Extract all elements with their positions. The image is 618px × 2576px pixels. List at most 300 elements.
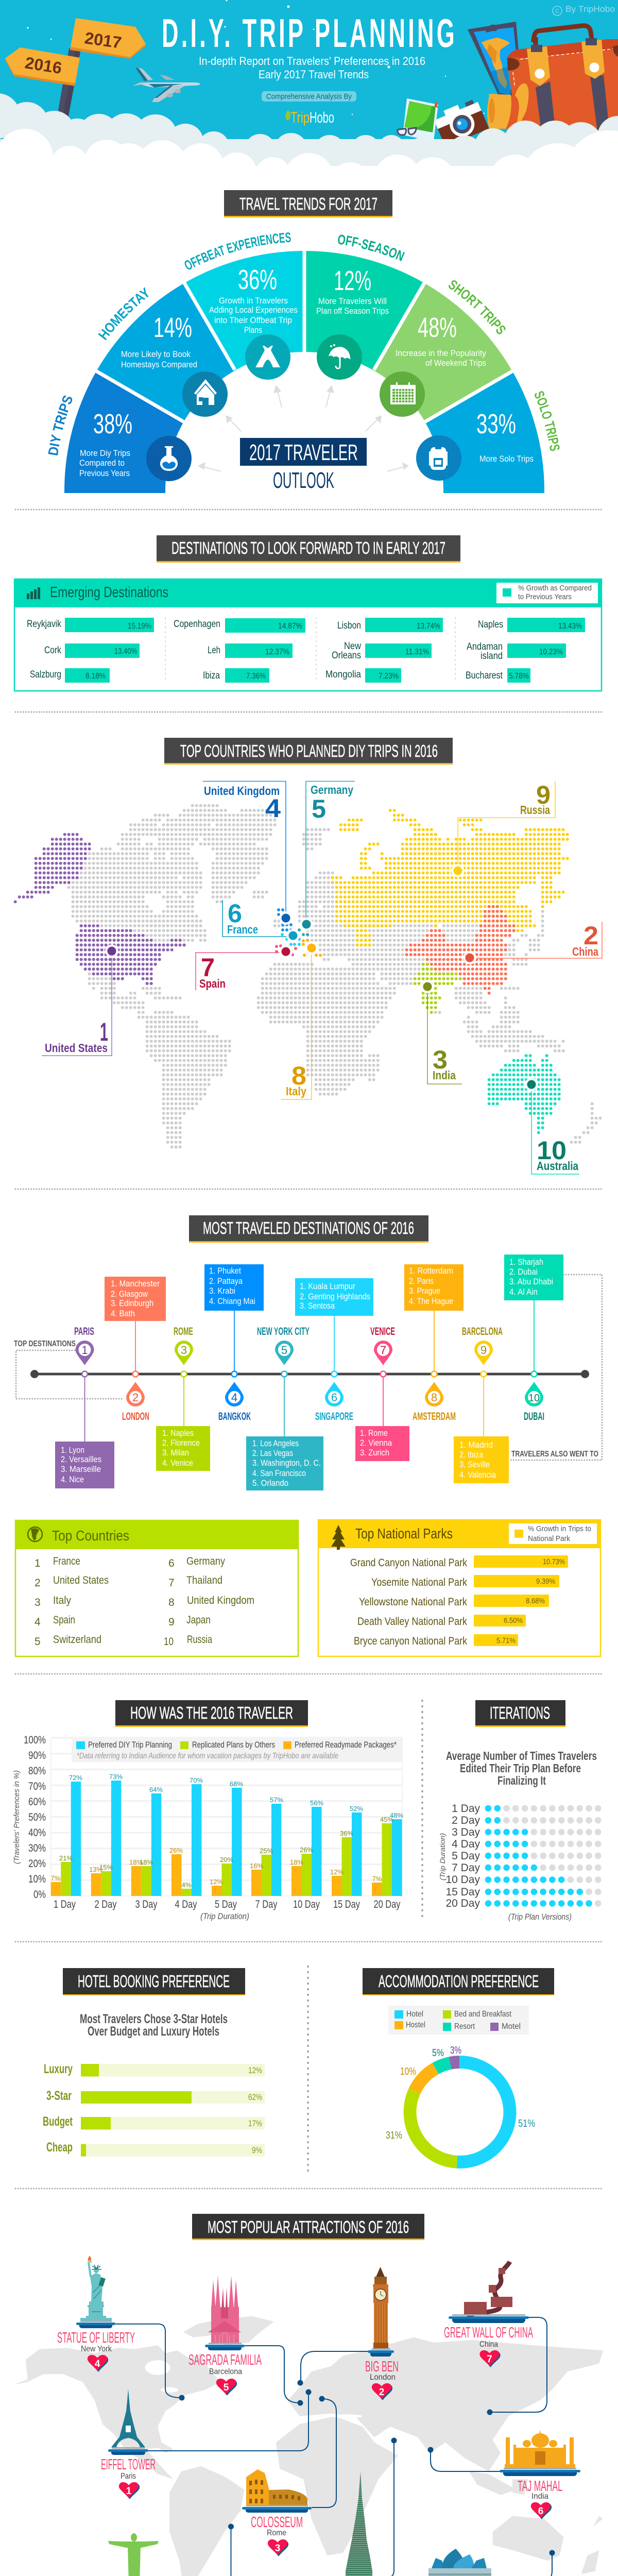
stop: Amsterdam: 2. Paris	[409, 1276, 434, 1286]
stop: Barcelona: 1. Madrid	[459, 1440, 493, 1450]
y axis labels: 80%	[28, 1765, 46, 1777]
dot world map	[0, 799, 618, 1159]
camera	[432, 97, 489, 147]
clouds: light layer	[0, 93, 618, 175]
axis titles	[438, 1833, 572, 1922]
orange value labels: 18%	[129, 1858, 143, 1866]
orange value labels: 7%	[372, 1875, 382, 1883]
stop: New York City: NEW YORK CITY	[257, 1326, 310, 1337]
donut labels: 10%	[400, 2066, 416, 2077]
x axis labels: 5 Day	[215, 1899, 237, 1910]
y axis labels	[24, 1734, 46, 1901]
row labels: 2 Day	[452, 1815, 480, 1826]
bar values: 5.78%	[509, 672, 529, 681]
donut labels: 5%	[432, 2047, 444, 2059]
curved sector labels: OFF-SEASON	[338, 235, 405, 261]
icon: house	[194, 379, 217, 405]
bar values: 12.37%	[265, 648, 289, 656]
sector: off-season	[304, 251, 424, 380]
row labels: 3 Day	[452, 1826, 480, 1838]
TripHobo logo	[285, 109, 334, 126]
green value labels	[59, 1816, 393, 1889]
x axis labels: 10 Day	[293, 1899, 320, 1910]
bar labels: 3-Star	[46, 2089, 72, 2103]
stop: Dubai: 4. Al Ain	[509, 1287, 538, 1297]
stop: Amsterdam: 3. Prague	[409, 1286, 440, 1296]
attraction: Colosseum: COLOSSEUM	[251, 2514, 303, 2531]
blue value labels: 52%	[350, 1805, 363, 1812]
green value labels: 25%	[260, 1847, 273, 1855]
stop: New York City: 1. Los Angeles	[252, 1438, 299, 1448]
stop: Dubai: 2. Dubai	[509, 1267, 538, 1277]
country ranking: Russia	[187, 1634, 212, 1646]
glasses	[398, 128, 416, 135]
x axis labels: 20 Day	[374, 1899, 401, 1910]
curved sector labels: OFFBEAT EXPERIENCES	[184, 232, 291, 270]
x axis labels: 3 Day	[135, 1899, 158, 1910]
axis nodes	[82, 1371, 537, 1377]
sector: offbeat experiences: 36%	[238, 264, 277, 295]
y axis labels: 0%	[33, 1889, 46, 1901]
blue value labels: 48%	[390, 1811, 403, 1819]
callout: 9 Russia: Russia	[520, 803, 550, 817]
grid	[51, 1738, 402, 1880]
orange value labels	[51, 1846, 382, 1886]
legend	[72, 1739, 402, 1762]
attraction: Sagrada Familia: 5	[224, 2382, 229, 2393]
heading: destinations	[157, 535, 460, 563]
icon: globe	[28, 1527, 42, 1541]
row labels: 10 Day	[445, 1874, 480, 1886]
park labels: Bryce canyon National Park	[354, 1635, 467, 1647]
heading: iterations	[475, 1700, 565, 1727]
stop: Venice: VENICE	[370, 1326, 395, 1337]
attraction: Big Ben: London	[370, 2373, 396, 2382]
heading: hotel booking	[63, 1968, 245, 1995]
callout: 2 China: 2	[583, 921, 598, 950]
green value labels: 26%	[300, 1846, 313, 1854]
donut ring	[410, 2062, 510, 2162]
legend: % Growth in Trips to	[528, 1524, 591, 1533]
country ranking	[35, 1555, 254, 1648]
x axis labels	[54, 1899, 401, 1910]
country ranking: 5	[35, 1636, 41, 1648]
callout: 4 United Kingdom: 4	[265, 794, 281, 823]
subtitle: Early 2017 Travel Trends	[259, 68, 369, 81]
y axis labels: 60%	[28, 1796, 46, 1808]
connector end dots	[179, 2380, 555, 2555]
bar labels: New	[344, 641, 361, 652]
subtitle	[199, 55, 425, 81]
attraction: Taj Mahal	[500, 2430, 580, 2519]
attraction: Opera House	[425, 2549, 494, 2576]
stop: Rome: 3	[181, 1344, 187, 1357]
sector: DIY trips: Previous Years	[79, 468, 130, 478]
bar labels: Mongolia	[325, 669, 361, 680]
bar values: 14.87%	[278, 622, 302, 631]
callout: 9 Russia: 9	[536, 781, 551, 809]
country ranking: 10	[164, 1636, 174, 1648]
bar labels: Bucharest	[466, 670, 503, 681]
stop: Barcelona: 3. Seville	[459, 1460, 490, 1469]
row labels: 20 Day	[445, 1897, 480, 1909]
callout: 3 India: India	[433, 1069, 456, 1082]
orange value labels: 7%	[51, 1874, 61, 1882]
hotel description: Most Travelers Chose 3-Star Hotels	[80, 2012, 228, 2026]
iterations dot chart	[438, 1749, 598, 1922]
orange value labels: 16%	[250, 1862, 263, 1870]
attraction: Sagrada Familia: Barcelona	[209, 2367, 242, 2376]
axis titles: (Trip Duration)	[438, 1833, 447, 1880]
signpost: 2017	[83, 28, 123, 52]
stop: Singapore: 3. Sentosa	[300, 1301, 335, 1311]
heading: top countries	[164, 738, 453, 765]
callout: 7 Spain: Spain	[199, 977, 226, 990]
green value labels: 18%	[140, 1858, 153, 1866]
green bars	[61, 1823, 392, 1896]
header banner	[0, 0, 618, 220]
blue dots	[488, 1808, 589, 1903]
stop: London: 3. Edinburgh	[111, 1298, 153, 1308]
grey dots	[507, 1808, 598, 1903]
subtitle: In-depth Report on Travelers' Preferences in 2016	[199, 55, 425, 67]
y axis labels: 40%	[28, 1827, 46, 1839]
attraction: Burj Khalifa	[332, 2471, 390, 2576]
row labels	[445, 1803, 480, 1909]
stop: Bangkok: 4	[231, 1391, 237, 1404]
heading: travel trends	[224, 190, 392, 217]
callout: 8 Italy	[281, 941, 318, 1099]
y axis labels: 20%	[28, 1858, 46, 1870]
bar values: 9%	[252, 2145, 262, 2155]
country ranking: 4	[35, 1616, 41, 1628]
panel: top countries	[15, 1520, 299, 1656]
dividers	[165, 617, 455, 682]
stop: Venice: 1. Rome	[360, 1428, 388, 1438]
stop: Rome: ROME	[174, 1326, 193, 1337]
stop: London: 2	[132, 1391, 139, 1404]
sector dividers	[91, 249, 518, 425]
y axis labels: 100%	[24, 1734, 46, 1746]
panel title: Top Countries	[52, 1528, 129, 1544]
stop: London: 2. Glasgow	[111, 1289, 148, 1299]
blue value labels: 68%	[230, 1780, 243, 1788]
icon: bars	[27, 587, 40, 599]
attraction: Great Wall of China	[444, 2262, 533, 2367]
park values: 10.73%	[543, 1557, 565, 1566]
bar labels: Andaman	[467, 641, 503, 652]
callout: 3 India: 3	[433, 1045, 448, 1074]
bar labels	[43, 2062, 73, 2155]
legend: % Growth as Compared	[518, 584, 592, 592]
trend fan chart	[64, 249, 544, 493]
country ranking: France	[53, 1555, 80, 1567]
icon: backpack	[429, 446, 448, 470]
sky stars	[27, 0, 607, 115]
stop: Paris: 1	[81, 1344, 88, 1357]
sector: short trips: 48%	[418, 312, 457, 343]
sector: DIY trips: 38%	[93, 409, 132, 439]
stop: Dubai	[504, 1255, 563, 1422]
park bars	[474, 1555, 568, 1646]
country ranking: United States	[53, 1574, 109, 1586]
legend: Preferred Readymade Packages*	[295, 1740, 397, 1750]
attraction: Eiffel Tower: Paris	[121, 2472, 136, 2481]
stems	[84, 1300, 534, 1442]
y axis labels: 30%	[28, 1842, 46, 1854]
stop: Amsterdam: 1. Rotterdam	[409, 1266, 453, 1276]
bar labels: Luxury	[44, 2062, 73, 2076]
country ranking: 9	[168, 1616, 175, 1628]
sector: off-season: More Travelers Will	[318, 296, 387, 306]
axis titles: (Trip Plan Versions)	[508, 1912, 572, 1922]
bars	[65, 618, 585, 683]
bar values: 10.23%	[539, 648, 563, 656]
legend: Bed and Breakfast	[454, 2010, 511, 2019]
callout: 10 Australia: Australia	[537, 1159, 578, 1173]
accommodation donut chart	[386, 2006, 535, 2162]
bar values: 7.23%	[379, 672, 399, 681]
stop: Singapore	[295, 1278, 373, 1422]
stop: Bangkok: 2. Pattaya	[209, 1276, 243, 1286]
park labels: Yellowstone National Park	[359, 1596, 467, 1608]
legend: Motel	[502, 2022, 521, 2031]
heading: popular attractions: MOST POPULAR ATTRACTIONS OF 2016	[208, 2217, 409, 2236]
callout: 5 Germany: 5	[312, 794, 326, 823]
attraction: Taj Mahal: TAJ MAHAL	[518, 2478, 562, 2495]
bar values: 8.18%	[85, 672, 106, 681]
callout: 4 United Kingdom	[203, 781, 293, 925]
heading: destinations: DESTINATIONS TO LOOK FORWARD TO IN EARLY 2017	[171, 538, 445, 557]
heading: most traveled: MOST TRAVELED DESTINATIONS OF 2016	[203, 1218, 414, 1238]
callout: 2 China	[463, 921, 602, 964]
sector: off-season: 12%	[334, 265, 371, 296]
sector: short trips: Increase in the Popularity	[396, 348, 486, 358]
icon: tree	[331, 1525, 346, 1550]
orange value labels: 26%	[169, 1846, 183, 1854]
bar values: 12%	[248, 2065, 262, 2075]
sector: homestay: Homestays Compared	[121, 360, 197, 369]
heading: how was the 2016 traveler: HOW WAS THE 2016 TRAVELER	[130, 1703, 293, 1722]
callout: 7 Spain	[196, 945, 293, 990]
bar labels: Orleans	[332, 650, 361, 661]
blue value labels: 57%	[270, 1796, 283, 1804]
green value labels: 36%	[340, 1829, 353, 1837]
legend	[509, 1523, 597, 1544]
bar labels: Leh	[208, 645, 220, 656]
icon: flask	[160, 446, 178, 471]
legend: Replicated Plans by Others	[192, 1740, 275, 1750]
bar labels: Lisbon	[337, 620, 361, 631]
green value labels: 45%	[380, 1816, 393, 1823]
legend: Hostel	[406, 2021, 425, 2029]
x axis labels: 4 Day	[175, 1899, 197, 1910]
stop: Paris: 2. Versailles	[61, 1454, 101, 1464]
bar labels	[27, 619, 503, 681]
stop: Barcelona: 2. Ibiza	[459, 1450, 483, 1460]
bar labels: Ibiza	[203, 670, 220, 681]
sector: homestay	[96, 283, 235, 421]
orange value labels: 13%	[89, 1866, 102, 1873]
hotel booking chart	[43, 2012, 265, 2157]
orange value labels: 12%	[330, 1868, 344, 1876]
stop: New York City: 4. San Francisco	[252, 1468, 306, 1478]
bar values: 11.31%	[405, 648, 429, 656]
callout: 10 Australia	[525, 1078, 579, 1174]
country ranking: 7	[168, 1577, 175, 1589]
callout: 6 France: 6	[228, 899, 242, 928]
legend	[388, 2006, 529, 2035]
stop: Paris: 1. Lyon	[61, 1445, 84, 1455]
blue value labels	[69, 1773, 403, 1819]
stop: Venice: 2. Vienna	[360, 1438, 392, 1448]
center label: 2017 traveler outlook: OUTLOOK	[273, 468, 334, 493]
orange bars	[51, 1854, 382, 1896]
sector: homestay: More Likely to Book	[121, 349, 191, 359]
stop: Amsterdam: 8	[431, 1391, 437, 1404]
attraction: Colosseum: 3	[275, 2543, 280, 2554]
grey world map	[14, 2316, 603, 2576]
suitcase	[507, 26, 618, 155]
blue value labels: 56%	[310, 1799, 323, 1807]
curved sector labels: SOLO TRIPS	[535, 391, 559, 451]
axis line	[30, 1370, 589, 1378]
bar labels: island	[480, 651, 503, 662]
country ranking: 2	[35, 1577, 41, 1589]
signpost	[5, 18, 146, 122]
stop: Bangkok: 4. Chiang Mai	[209, 1296, 255, 1306]
park labels	[350, 1557, 467, 1647]
x axis labels: 2 Day	[95, 1899, 117, 1910]
bar labels: Reykjavik	[27, 619, 61, 630]
legend	[496, 583, 598, 603]
donut labels	[386, 2045, 535, 2141]
sector: short trips	[374, 283, 512, 421]
stop: Paris: 4. Nice	[61, 1475, 84, 1484]
callout: 7 Spain: 7	[201, 953, 215, 982]
attraction: Eiffel Tower	[101, 2389, 156, 2499]
heading: most traveled	[189, 1215, 428, 1243]
curved sector labels	[48, 232, 559, 455]
attraction: Colosseum: Rome	[267, 2529, 286, 2537]
attraction: Statue of Liberty: STATUE OF LIBERTY	[57, 2330, 135, 2346]
callout: 8 Italy: Italy	[286, 1084, 306, 1098]
sector: solo trips: 33%	[476, 409, 516, 439]
stop: Venice	[355, 1326, 409, 1461]
blue value labels: 73%	[109, 1773, 123, 1781]
legend: National Park	[528, 1534, 570, 1543]
stop: Rome: 2. Florence	[162, 1438, 200, 1448]
green value labels: 20%	[220, 1856, 233, 1863]
stop: Bangkok: 1. Phuket	[209, 1266, 241, 1276]
stop: London: LONDON	[122, 1411, 149, 1422]
row labels: 5 Day	[452, 1850, 480, 1862]
callout: 6 France	[222, 899, 300, 942]
stop: Singapore: SINGAPORE	[315, 1411, 353, 1422]
park values: 9.39%	[536, 1577, 555, 1586]
bar values: 17%	[248, 2119, 262, 2128]
curved sector labels: SHORT TRIPS	[449, 280, 506, 334]
blue value labels: 64%	[149, 1786, 163, 1793]
attraction: Great Wall of China: GREAT WALL OF CHINA	[444, 2325, 533, 2341]
stop: New York City: 2. Las Vegas	[252, 1448, 293, 1458]
dotted connector: travelers also went to	[510, 1275, 602, 1460]
bar fills	[81, 2064, 192, 2157]
blue value labels: 72%	[69, 1774, 82, 1782]
dotted connector: top destinations	[14, 1340, 124, 1399]
callout: 1 United States: United States	[45, 1041, 108, 1055]
icon: calendar	[390, 382, 416, 404]
y axis title: (Travelers' Preferences in %)	[12, 1770, 21, 1864]
panel title: Emerging Destinations	[50, 584, 168, 601]
y axis labels: 50%	[28, 1811, 46, 1823]
iterations description: Finalizing It	[497, 1774, 546, 1787]
stop: Paris: PARIS	[74, 1326, 94, 1337]
stop: London: 4. Bath	[111, 1309, 135, 1318]
sector: offbeat experiences: Growth in Travelers	[219, 296, 288, 306]
x axis labels: 15 Day	[333, 1899, 360, 1910]
curved sector labels: HOMESTAY	[98, 287, 148, 340]
sector: off-season: Plan off Season Trips	[316, 306, 389, 316]
bar values: 7.36%	[246, 672, 266, 681]
legend: Hotel	[406, 2010, 423, 2019]
country ranking: 6	[168, 1557, 175, 1569]
row labels: 15 Day	[445, 1886, 480, 1898]
donut labels: 31%	[386, 2130, 402, 2141]
stop: Dubai: 10	[528, 1393, 540, 1404]
callout: 2 China: China	[572, 945, 598, 958]
sector: DIY trips	[64, 371, 192, 493]
y axis labels: 90%	[28, 1750, 46, 1761]
attraction: Statue of Liberty: 4	[95, 2359, 100, 2369]
attraction: Sagrada Familia	[188, 2276, 262, 2396]
bar values: 13.40%	[114, 647, 137, 656]
bar labels: Copenhagen	[174, 619, 220, 630]
green value labels: 21%	[59, 1854, 73, 1862]
callout: 6 France: France	[227, 923, 258, 936]
park labels: Death Valley National Park	[357, 1616, 467, 1628]
sector: short trips: of Weekend Trips	[425, 358, 486, 368]
bar labels: Cork	[44, 645, 61, 656]
bar values	[85, 622, 582, 681]
stop: New York City	[246, 1326, 323, 1490]
sector: offbeat experiences: into Their Offbeat Trip	[214, 315, 292, 325]
attraction: Statue of Liberty: New York	[81, 2345, 112, 2353]
attraction: Christ the Redeemer	[88, 2533, 180, 2576]
country ranking: Japan	[186, 1614, 211, 1626]
stop: Amsterdam: 4. The Hague	[409, 1296, 453, 1306]
stop: Paris	[55, 1326, 114, 1488]
panel title: Top National Parks	[355, 1526, 453, 1541]
stop: New York City: 3. Washington, D. C.	[252, 1458, 321, 1468]
park values: 5.71%	[496, 1636, 516, 1645]
heading: hotel booking: HOTEL BOOKING PREFERENCE	[78, 1972, 230, 1991]
polaroid photo	[403, 98, 438, 141]
country ranking: United Kingdom	[187, 1595, 254, 1606]
sector: offbeat experiences: Plans	[244, 325, 262, 335]
heading: accommodation	[363, 1968, 554, 1995]
callout: 1 United States: 1	[100, 1018, 108, 1046]
y axis labels: 70%	[28, 1781, 46, 1792]
iterations description	[446, 1749, 597, 1787]
bar values	[248, 2065, 262, 2155]
hotel description: Over Budget and Luxury Hotels	[88, 2024, 219, 2039]
bar chart: trip planning preference by duration	[12, 1734, 403, 1921]
analysis badge: Comprehensive Analysis By	[266, 92, 352, 101]
map illustration	[468, 22, 519, 96]
stop: Dubai: DUBAI	[524, 1411, 544, 1422]
clouds: white layer	[0, 129, 618, 220]
